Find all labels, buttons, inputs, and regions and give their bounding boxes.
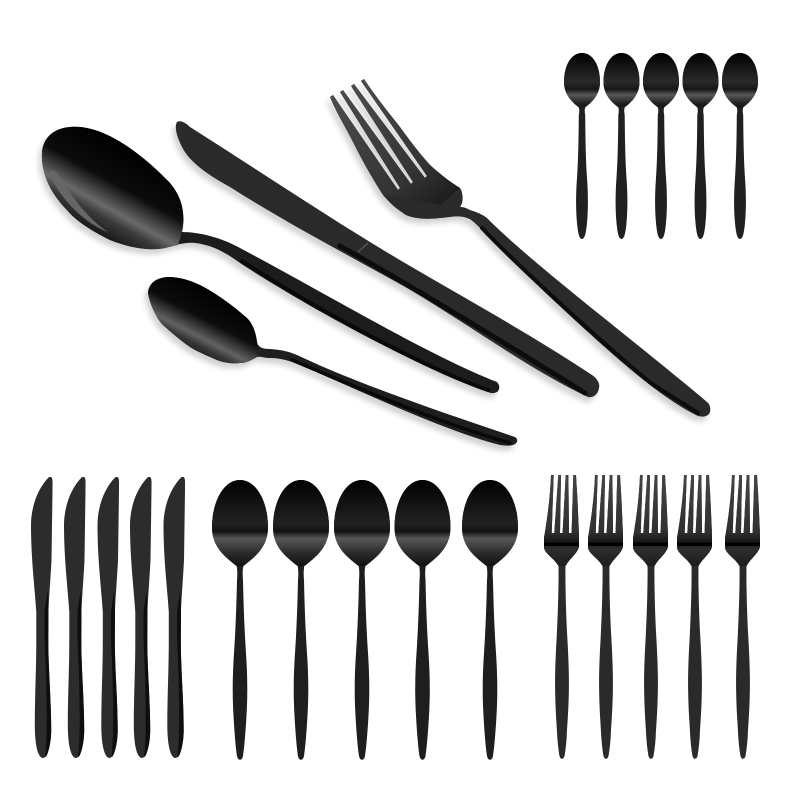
medium spoon	[148, 277, 517, 446]
group: five knives	[31, 477, 185, 758]
large dinner fork	[330, 79, 710, 417]
group: five teaspoons	[564, 53, 758, 239]
group: five forks	[544, 475, 760, 759]
group: five tablespoons	[212, 480, 518, 760]
soft shadows under large cutlery	[39, 84, 707, 451]
large dinner knife	[176, 121, 599, 397]
large serving spoon	[42, 127, 499, 393]
